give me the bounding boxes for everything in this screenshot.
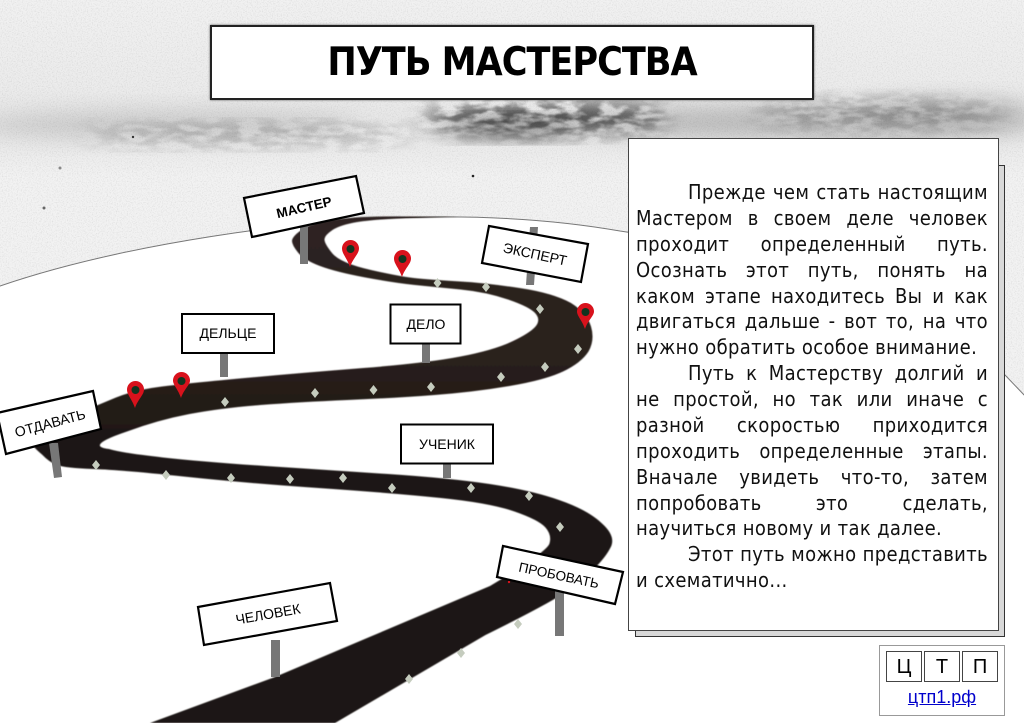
panel: description text: двигаться дальше - вот то, на что <box>636 309 988 333</box>
logo: ЦТП: цтп1.рф <box>908 687 976 707</box>
panel shadow <box>635 165 1005 637</box>
panel: description text: нужно обратить особое внимание. <box>636 335 977 359</box>
map pin 2 <box>394 250 411 277</box>
sign: ЭКСПЕРТ: ЭКСПЕРТ <box>502 239 569 269</box>
sign: ДЕЛЬЦЕ <box>182 314 274 377</box>
sign: ЧЕЛОВЕК: ЧЕЛОВЕК <box>234 600 303 628</box>
map pin 4 <box>173 372 190 398</box>
panel: description text <box>628 138 999 631</box>
logo: ЦТП: Т <box>936 656 948 678</box>
panel: description text: проходить определенные этапы. <box>636 439 988 463</box>
panel: description text: не простой, но так или иначе с <box>636 387 988 411</box>
map pin 1 <box>342 240 359 267</box>
sign: ЭКСПЕРТ <box>482 226 588 285</box>
sign: ПРОБОВАТЬ <box>497 546 623 636</box>
logo: ЦТП: П <box>973 656 987 678</box>
panel: description text: Прежде чем стать настоящим <box>688 180 988 204</box>
sign: УЧЕНИК <box>401 424 493 478</box>
sign: ЧЕЛОВЕК <box>198 583 337 677</box>
panel: description text: Этот путь можно представить <box>688 542 988 566</box>
panel: description text: научиться новому и так далее. <box>636 516 942 540</box>
planet surface <box>0 217 1024 723</box>
sign: УЧЕНИК: УЧЕНИК <box>419 436 476 452</box>
sign: ПРОБОВАТЬ: ПРОБОВАТЬ <box>517 560 601 591</box>
title <box>210 25 814 100</box>
road markers: diamonds <box>92 278 582 684</box>
sign: ДЕЛЬЦЕ: ДЕЛЬЦЕ <box>200 325 256 341</box>
panel: description text: Мастером в своем деле человек <box>636 206 988 230</box>
map pin 5 <box>127 381 144 408</box>
panel: description text: Осознать этот путь, понять на <box>636 258 988 282</box>
panel: description text: попробовать это сделать, <box>636 491 988 515</box>
hidden pin tip beside sign <box>508 581 510 583</box>
logo: ЦТП <box>879 645 1005 716</box>
sign: ДЕЛО: ДЕЛО <box>407 316 446 332</box>
winding road <box>32 216 612 723</box>
sign: МАСТЕР: МАСТЕР <box>275 194 333 221</box>
panel: description text: каком этапе находитесь Вы и как <box>636 284 988 308</box>
panel: description text: и схематично... <box>636 568 788 592</box>
sign: МАСТЕР <box>244 176 364 264</box>
logo: ЦТП: Ц <box>897 656 911 678</box>
sign: ОТДАВАТЬ: ОТДАВАТЬ <box>13 406 87 440</box>
title: ПУТЬ МАСТЕРСТВА <box>327 40 697 85</box>
sign: ДЕЛО <box>390 304 460 363</box>
sign: ОТДАВАТЬ <box>0 391 101 478</box>
panel: description text: разной скоростью приходится <box>636 413 988 437</box>
panel: description text: Вначале увидеть что-то, затем <box>636 465 988 489</box>
panel: description text: Путь к Мастерству долгий и <box>688 361 988 385</box>
map pin 3 <box>577 303 594 329</box>
sky background <box>0 0 1024 420</box>
panel: description text: проходит определенный путь. <box>636 232 988 256</box>
